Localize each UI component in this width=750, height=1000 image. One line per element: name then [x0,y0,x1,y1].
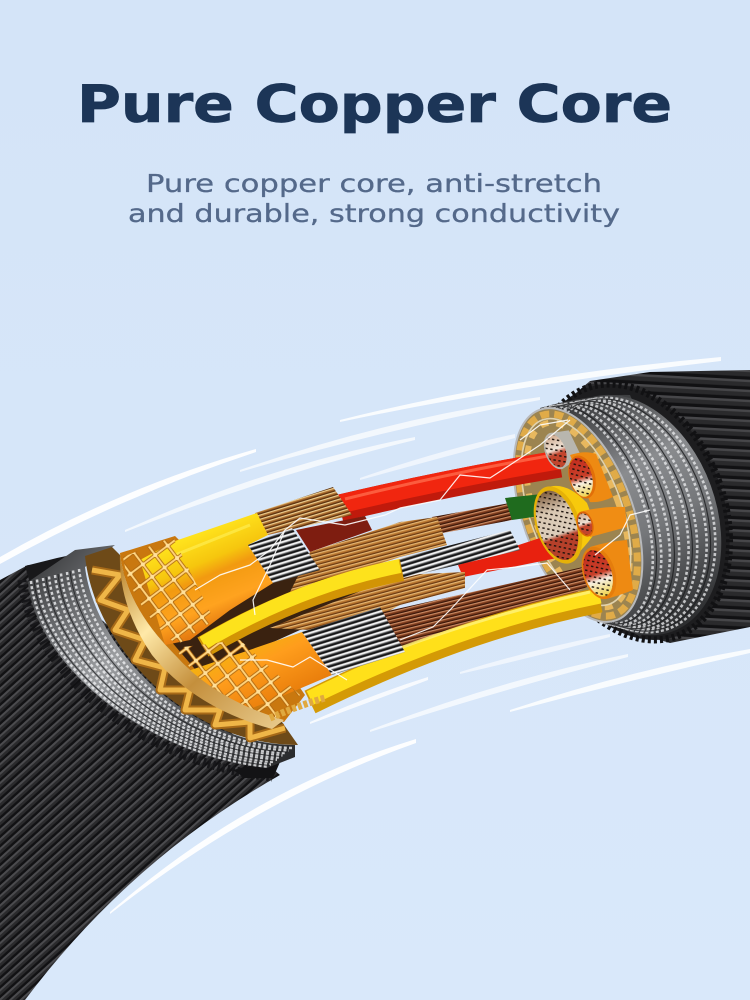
inner core backing [120,536,305,722]
yellow wire middle [203,566,402,647]
left cable end [0,536,305,1000]
gold fray [270,698,325,718]
red wire lower [458,537,557,577]
wire bundle [140,456,600,715]
left cavity [85,547,298,745]
orange top wire end [564,452,613,502]
upper yellow and orange wire block [140,513,273,645]
right silver ring [491,369,750,661]
left collar lip top [25,552,85,590]
red wire top [340,456,560,508]
right jacket serrated edge [500,356,750,668]
left silver ring [28,545,295,768]
low orange wire end [575,540,633,604]
dark copper large [370,567,587,665]
subtitle: and durable, strong conductivity [128,199,620,228]
gold mesh braid upper [123,537,214,645]
inner gold ring [120,553,284,729]
dark copper to green wire [432,503,512,533]
left jacket [0,565,280,1000]
yellow wire front [310,592,600,702]
lightning arcs [195,420,650,680]
right cable end [488,356,750,668]
gold braid teeth [92,570,285,738]
copper strand 1 [255,487,352,535]
copper strand 2 [290,517,447,592]
left collar lip bottom [233,762,280,778]
yellow wire stripe [175,525,250,555]
dark red wire [296,516,372,552]
silver strand 2 [393,530,520,578]
gold mesh braid lower [175,640,300,724]
right cavity [488,391,668,639]
green wire [505,494,542,520]
speed streaks [0,357,750,914]
small top face [539,426,583,473]
silver strand 3 [302,607,405,675]
small orange wire end [573,507,627,539]
subtitle [128,169,620,228]
orange wire lower [185,632,332,715]
copper strand 3 [270,572,465,632]
bundle backing [170,575,400,675]
silver strand 1 [248,528,320,583]
right conductor ends [525,426,633,604]
left jacket serrated edge [22,580,272,777]
large yellow wire end [525,480,597,570]
title: Pure Copper Core [77,75,672,135]
subtitle: Pure copper core, anti-stretch [146,169,602,198]
right jacket [570,370,750,643]
